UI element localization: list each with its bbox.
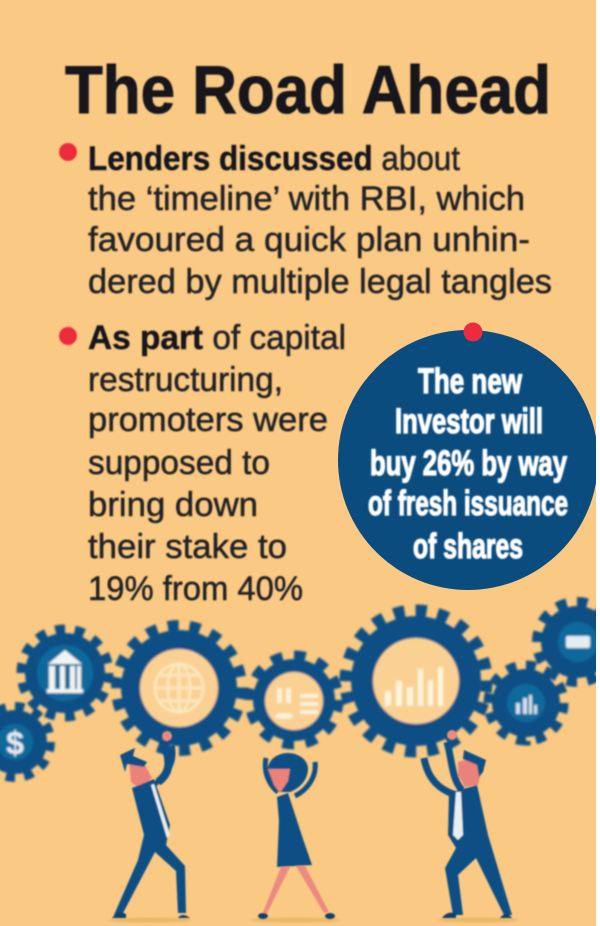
line 3: favoured a quick plan unhin- [88, 221, 530, 259]
tie [453, 792, 463, 840]
gear: small chart [488, 665, 564, 741]
figure: woman [258, 753, 335, 919]
ground shadows [108, 918, 518, 922]
arms [158, 738, 168, 782]
body and legs [114, 779, 186, 915]
callout text: The new [418, 362, 523, 401]
figure: man left [112, 731, 190, 918]
callout text [368, 362, 568, 566]
line 5: bring down [88, 486, 258, 524]
line 2: the ‘timeline’ with RBI, which [88, 180, 525, 218]
line 7: 19% from 40% [88, 570, 303, 608]
icon: bank [47, 650, 83, 693]
bullet marker [59, 327, 77, 345]
line 1: As part of capital [88, 319, 346, 357]
bullet marker [59, 143, 77, 161]
red dot [464, 322, 482, 342]
line 4: supposed to [88, 444, 270, 482]
gear: dollar: $ [6, 725, 24, 761]
callout circle [338, 322, 598, 590]
arms [265, 758, 315, 796]
gear: globe [117, 626, 241, 750]
legs [262, 866, 329, 915]
shoes [442, 913, 512, 918]
head [458, 757, 482, 787]
line 4: dered by multiple legal tangles [88, 263, 552, 301]
gear: dollar [0, 707, 50, 777]
arms [424, 758, 456, 795]
title: The Road Ahead [65, 52, 551, 128]
circle background [338, 330, 598, 590]
shoes [112, 913, 190, 918]
head [129, 760, 152, 789]
body and legs [445, 785, 512, 915]
text block: first bullet [59, 140, 552, 301]
line 6: their stake to [88, 528, 287, 566]
icon: marks and lines [275, 688, 318, 719]
callout text: Investor will [395, 402, 543, 441]
icon: small bars [516, 695, 537, 714]
gear: bar chart [346, 611, 486, 751]
gears illustration [0, 602, 600, 777]
icon: globe [155, 664, 203, 712]
line 1: Lenders discussed about [88, 140, 461, 178]
line 3: promoters were [88, 401, 328, 439]
hair [267, 753, 308, 792]
dress [277, 793, 312, 867]
figure: man right [424, 730, 512, 918]
icon: bars [385, 667, 443, 706]
callout text: of shares [413, 527, 523, 566]
face [268, 769, 290, 793]
text block: second bullet [59, 319, 346, 608]
line 2: restructuring, [88, 361, 283, 399]
tie [151, 784, 170, 838]
gear: ideas [250, 656, 338, 744]
gear: bank [22, 630, 108, 716]
shoes [258, 913, 268, 919]
gear: card [537, 602, 600, 682]
